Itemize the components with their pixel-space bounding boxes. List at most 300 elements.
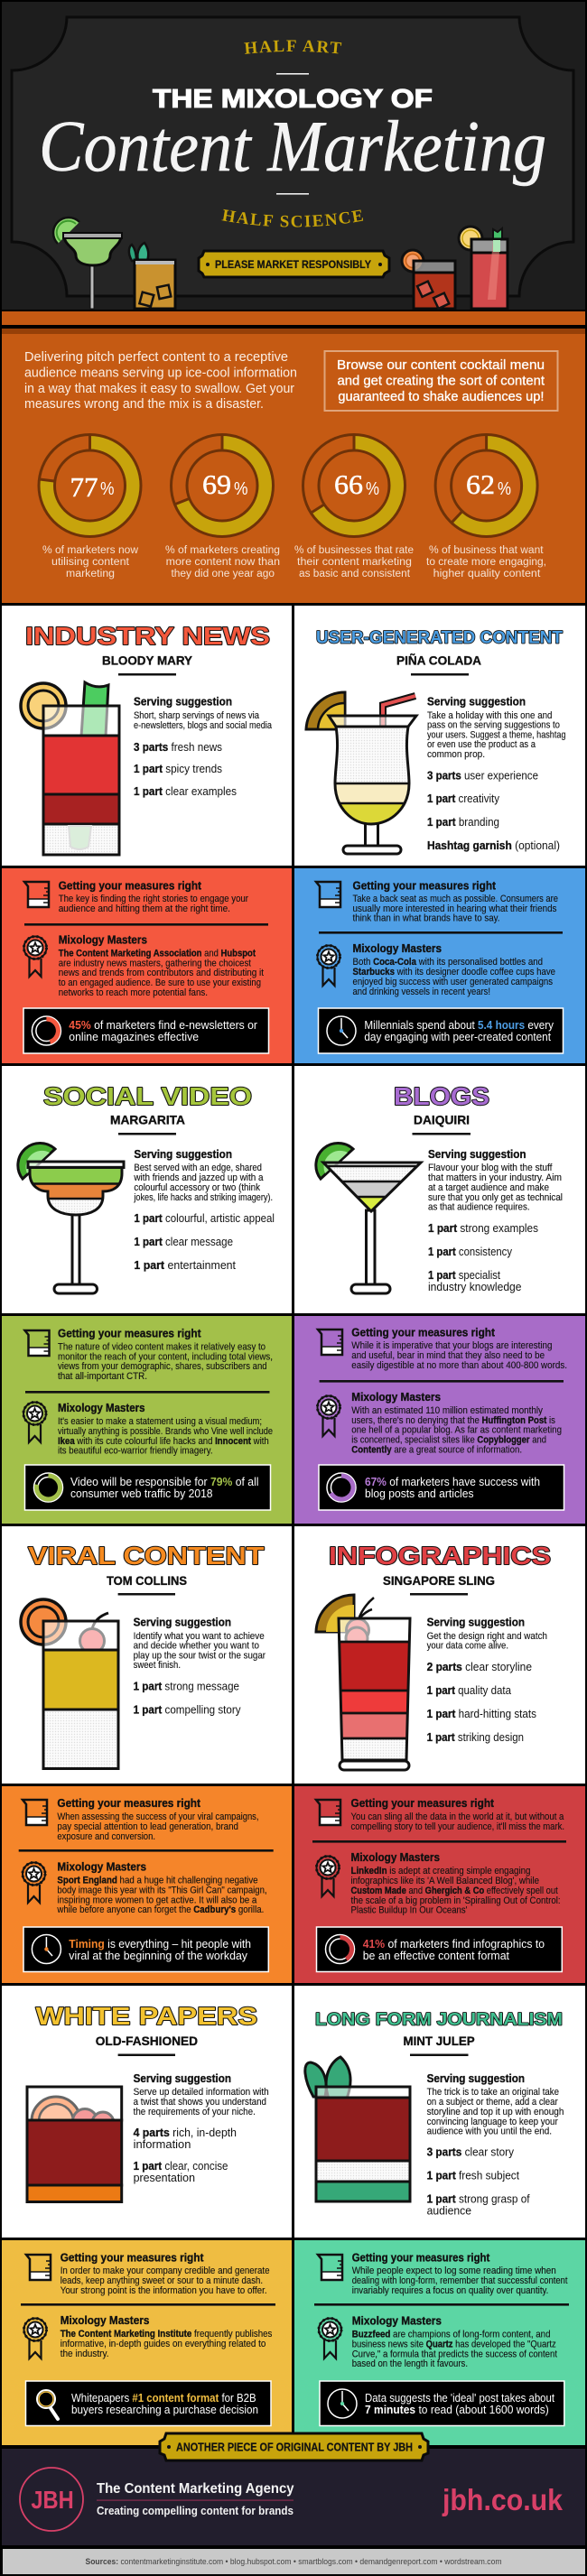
serving suggestion: industry knowledge bbox=[428, 1280, 522, 1293]
intro paragraph: audience means serving up ice-cool information bbox=[24, 365, 297, 381]
masters text: The Content Marketing Institute frequently publishes bbox=[61, 2329, 273, 2340]
icon: beaker bbox=[316, 882, 340, 907]
stat box: buyers researching a purchase decision bbox=[71, 2403, 258, 2416]
serving suggestion: audience bbox=[427, 2204, 471, 2217]
cocktail name: TOM COLLINS bbox=[107, 1573, 187, 1588]
masters text: Ikea with its cute colourful life hacks and Innocent with bbox=[58, 1436, 269, 1447]
measures text: The nature of video content makes it relatively easy to bbox=[58, 1341, 266, 1352]
stat box: day engaging with peer-created content bbox=[364, 1030, 551, 1043]
serving suggestion: Serving suggestion bbox=[134, 695, 232, 708]
donut: 62% bbox=[435, 434, 537, 536]
masters text: enjoyed big success with user generated campaigns bbox=[352, 977, 554, 987]
serving suggestion: convincing language to keep your bbox=[427, 2117, 558, 2127]
panel: white papers bbox=[2, 1986, 292, 2238]
measures text: In order to make your company credible and generate bbox=[61, 2266, 269, 2276]
stat box bbox=[319, 1465, 564, 1510]
serving suggestion: 3 parts fresh news bbox=[134, 740, 222, 754]
icon: tom collins glass bbox=[21, 1599, 118, 1769]
panel: industry news tips bbox=[2, 868, 292, 1063]
bar counter bbox=[2, 311, 585, 325]
stat box bbox=[25, 2381, 271, 2426]
tagline: half art: HALF ART bbox=[244, 40, 341, 54]
serving suggestion: 1 part strong message bbox=[134, 1679, 239, 1693]
serving suggestion: as that audience requires. bbox=[428, 1202, 530, 1213]
icon: margarita glass bbox=[18, 1143, 126, 1293]
masters text: Both Coca-Cola with its personalised bottles and bbox=[352, 957, 543, 968]
masters text: The Content Marketing Association and Hubspot bbox=[59, 948, 256, 959]
cocktail name: BLOODY MARY bbox=[102, 653, 193, 668]
caption: 66%: % of businesses that rate bbox=[294, 545, 414, 556]
serving suggestion bbox=[133, 1147, 275, 1272]
ornate frame bbox=[12, 17, 573, 296]
serving suggestion: 4 parts rich, in-depth bbox=[134, 2126, 237, 2139]
serving suggestion: sure that you only get as technical bbox=[428, 1192, 563, 1203]
panel: footer bbox=[2, 2449, 585, 2545]
measures text: Getting your measures right bbox=[61, 2251, 204, 2264]
serving suggestion: e-newsletters, blogs and social media bbox=[134, 720, 272, 731]
serving suggestion: or even use the product as a bbox=[427, 739, 536, 750]
stat box: Data suggests the 'ideal' post takes about bbox=[365, 2391, 554, 2405]
stat box: 67% of marketers have success with bbox=[365, 1475, 540, 1488]
caption: 77%: marketing bbox=[66, 569, 115, 579]
intro paragraph: measures wrong and the mix is a disaster. bbox=[24, 396, 264, 412]
icon: pina colada glass bbox=[306, 692, 416, 854]
serving suggestion: Identify what you want to achieve bbox=[134, 1631, 265, 1642]
serving suggestion: 1 part creativity bbox=[427, 792, 499, 805]
measures text: When assessing the success of your viral campaigns, bbox=[57, 1812, 259, 1822]
masters text: Mixology Masters bbox=[57, 1859, 146, 1874]
serving suggestion: Serving suggestion bbox=[427, 695, 526, 708]
serving suggestion: jokes, life hacks and striking imagery). bbox=[134, 1192, 273, 1203]
heading: LONG FORM JOURNALISM bbox=[315, 2011, 563, 2029]
masters text: With an estimated 110 million estimated monthly bbox=[351, 1405, 544, 1416]
donut: 77%: 77 bbox=[70, 471, 98, 503]
measures text: invariably requires a focus on quality over quantity. bbox=[352, 2285, 548, 2296]
measures text: easily digestible at no more than about 400-800 words. bbox=[351, 1360, 567, 1371]
serving suggestion: Serve up detailed information with bbox=[134, 2087, 269, 2098]
stat box bbox=[316, 1927, 562, 1971]
serving suggestion: 1 part striking design bbox=[427, 1730, 524, 1744]
callout: browse menu: Browse our content cocktail menu bbox=[337, 357, 545, 373]
serving suggestion: at a target audience and make bbox=[428, 1182, 549, 1193]
masters text: Mixology Masters bbox=[350, 1850, 440, 1864]
stat box: Millennials spend about 5.4 hours every bbox=[364, 1018, 554, 1032]
masters text: business news site Quartz has developed the "Quartz bbox=[352, 2340, 556, 2350]
masters text: It's easier to make a statement using a visual medium; bbox=[58, 1416, 262, 1427]
masters text: Mixology Masters bbox=[61, 2313, 149, 2327]
icon: medal bbox=[319, 2318, 341, 2358]
masters text: Mixology Masters bbox=[351, 1390, 441, 1404]
caption: 69%: more content now than bbox=[166, 557, 280, 568]
icon: medal bbox=[23, 2318, 47, 2358]
caption: 66%: as basic and consistent bbox=[299, 569, 411, 579]
masters text: inspiring more women to get active. It will also be a bbox=[57, 1895, 256, 1906]
serving suggestion bbox=[427, 695, 565, 852]
measures text bbox=[58, 1327, 273, 1382]
tagline: half science: HALF SCIENCE bbox=[222, 209, 363, 227]
serving suggestion: common prop. bbox=[427, 749, 485, 760]
stat box: 7 minutes to read (about 1600 words) bbox=[365, 2403, 549, 2416]
serving suggestion: 1 part quality data bbox=[427, 1683, 512, 1697]
cocktail name: OLD-FASHIONED bbox=[96, 2034, 198, 2048]
measures text: Getting your measures right bbox=[59, 879, 202, 892]
serving suggestion: 1 part clear, concise bbox=[134, 2159, 228, 2173]
serving suggestion: audience with you until the end. bbox=[427, 2127, 552, 2137]
badge: please market responsibly bbox=[199, 251, 389, 277]
masters text: Mixology Masters bbox=[59, 933, 147, 946]
heading: BLOGS bbox=[394, 1082, 489, 1110]
icon: medal bbox=[316, 1856, 340, 1896]
serving suggestion: 1 part branding bbox=[427, 815, 499, 829]
intro paragraph bbox=[24, 349, 297, 412]
donut: 62%: 62 bbox=[466, 468, 495, 500]
serving suggestion: play up the sour twist or the sugar bbox=[134, 1650, 266, 1661]
logo: JBH bbox=[20, 2468, 83, 2531]
panel: user-generated content bbox=[294, 606, 585, 866]
donut: 66%: 66 bbox=[334, 468, 363, 500]
icon: beaker bbox=[318, 1330, 342, 1355]
cocktail name: DAIQUIRI bbox=[414, 1112, 470, 1126]
serving suggestion: your data come alive. bbox=[427, 1641, 508, 1652]
serving suggestion bbox=[134, 1616, 266, 1717]
donut: 69% bbox=[172, 434, 273, 536]
masters text: the industry. bbox=[61, 2349, 109, 2359]
serving suggestion: 1 part spicy trends bbox=[134, 762, 222, 775]
serving suggestion: 1 part compelling story bbox=[134, 1702, 241, 1717]
measures text: Getting your measures right bbox=[352, 879, 497, 892]
serving suggestion bbox=[427, 2071, 564, 2217]
serving suggestion: on a subject or theme, add a clear bbox=[427, 2097, 558, 2108]
masters text: Plastic Buildup In Our Oceans' bbox=[350, 1904, 467, 1915]
masters text bbox=[352, 941, 555, 997]
icon: medal bbox=[318, 946, 340, 986]
masters text bbox=[352, 2314, 557, 2369]
panel: social video tips bbox=[2, 1316, 292, 1524]
serving suggestion: 1 part colourful, artistic appeal bbox=[134, 1211, 275, 1225]
masters text: body image this year with its "This Girl Can" campaign, bbox=[57, 1885, 267, 1895]
measures text: Getting your measures right bbox=[351, 1325, 496, 1339]
logo: JBH: JBH bbox=[31, 2486, 74, 2514]
panel: sources bbox=[3, 2549, 585, 2574]
serving suggestion: 1 part specialist bbox=[428, 1268, 500, 1282]
serving suggestion: Serving suggestion bbox=[134, 1616, 231, 1628]
cocktail name: SINGAPORE SLING bbox=[383, 1573, 495, 1588]
panel: sources: Sources: contentmarketinginstitute.com • blog.hubspot.com • smartblogs.com • demandgenreport.com • wordstream.com bbox=[85, 2557, 502, 2566]
masters text: informative, in-depth guides on everything related to bbox=[61, 2339, 266, 2349]
stat box: 45% of marketers find e-newsletters or bbox=[69, 1018, 258, 1032]
serving suggestion: Short, sharp servings of news via bbox=[134, 710, 259, 721]
donut: 77% bbox=[39, 434, 141, 536]
serving suggestion: presentation bbox=[134, 2171, 195, 2184]
heading: INFOGRAPHICS bbox=[329, 1542, 551, 1570]
icon: old-fashioned glass bbox=[27, 2087, 122, 2202]
serving suggestion: Take a holiday with this one and bbox=[427, 710, 553, 721]
icon: mint julep glass bbox=[305, 2057, 410, 2201]
serving suggestion: your users. Suggest a theme, hashtag bbox=[427, 729, 565, 740]
cocktail name: MARGARITA bbox=[110, 1112, 185, 1126]
donut: 69%: 69 bbox=[202, 468, 231, 500]
heading: VIRAL CONTENT bbox=[28, 1542, 265, 1570]
masters text: are industry news masters, gathering the choicest bbox=[59, 959, 251, 969]
serving suggestion bbox=[427, 1616, 547, 1744]
icon: beaker bbox=[318, 2255, 342, 2280]
serving suggestion: information bbox=[134, 2137, 191, 2151]
measures text bbox=[59, 879, 248, 914]
panel: industry news bbox=[2, 606, 292, 866]
stat box bbox=[23, 1008, 269, 1053]
serving suggestion: Serving suggestion bbox=[427, 1616, 525, 1628]
heading: SOCIAL VIDEO bbox=[43, 1082, 252, 1110]
serving suggestion: 1 part clear examples bbox=[134, 784, 237, 798]
serving suggestion: Get the design right and watch bbox=[427, 1631, 547, 1642]
caption: 69%: % of marketers creating bbox=[165, 545, 280, 556]
stat box: Timing is everything – hit people with bbox=[69, 1937, 251, 1951]
panel: blogs bbox=[294, 1066, 585, 1313]
serving suggestion: a twist that shows you understand bbox=[134, 2097, 266, 2108]
measures text bbox=[57, 1796, 259, 1842]
icon: amber tumbler bbox=[129, 243, 175, 309]
measures text: that all-important CTR. bbox=[58, 1371, 147, 1382]
panel: long form journalism bbox=[294, 1986, 585, 2238]
masters text: Curve," a formula that predicts the success of content bbox=[352, 2349, 557, 2359]
masters text: Mixology Masters bbox=[352, 941, 442, 955]
title line 2 script: Content Marketing bbox=[39, 107, 546, 187]
serving suggestion: 3 parts user experience bbox=[427, 769, 538, 782]
donut: 69%: % bbox=[234, 479, 248, 499]
measures text: audience and hitting them at the right time. bbox=[59, 903, 230, 914]
icon: medal bbox=[23, 1403, 46, 1442]
measures text bbox=[350, 1796, 564, 1832]
measures text: and useful, bear in mind that they also need to be bbox=[351, 1350, 545, 1361]
masters text: networks to reach more potential fans. bbox=[59, 987, 208, 998]
measures text: Getting your measures right bbox=[350, 1796, 495, 1810]
callout: browse menu: guaranteed to shake audiences up! bbox=[338, 389, 544, 404]
panel: long form tips bbox=[294, 2240, 585, 2445]
caption: 77%: utilising content bbox=[51, 557, 130, 568]
measures text: Getting your measures right bbox=[58, 1327, 201, 1339]
panel: infographics tips bbox=[294, 1786, 585, 1983]
masters text: while before anyone can forget the Cadbury's gorilla. bbox=[57, 1904, 264, 1915]
measures text: usually more interested in hearing what their friends bbox=[352, 903, 557, 914]
icon: medal bbox=[318, 1395, 340, 1436]
panel: social video bbox=[2, 1066, 292, 1313]
masters text bbox=[61, 2313, 273, 2359]
icon: beaker bbox=[26, 2255, 51, 2280]
serving suggestion: sweet finish. bbox=[134, 1660, 181, 1671]
icon: beaker bbox=[23, 1800, 47, 1825]
measures text: leads, keep anything sweet or sour to a minute dash. bbox=[61, 2275, 263, 2286]
serving suggestion: 3 parts clear story bbox=[427, 2145, 514, 2159]
caption: 62% bbox=[426, 545, 546, 579]
serving suggestion: 1 part consistency bbox=[428, 1245, 512, 1258]
icon: beaker bbox=[25, 1330, 49, 1356]
stat box bbox=[25, 1465, 271, 1510]
agency name: The Content Marketing Agency bbox=[97, 2481, 294, 2497]
caption: 62%: to create more engaging, bbox=[426, 557, 546, 568]
serving suggestion: with friends and jazzed up with a bbox=[133, 1172, 264, 1183]
masters text: and drinking vessels in recent years! bbox=[352, 987, 490, 997]
measures text: While people expect to log some reading time when bbox=[352, 2266, 556, 2276]
heading: WHITE PAPERS bbox=[36, 2002, 257, 2030]
icon: beaker bbox=[316, 1800, 340, 1825]
panel: blogs tips bbox=[294, 1316, 585, 1524]
serving suggestion: that matters in your industry. Aim bbox=[428, 1172, 562, 1183]
stat box: Whitepapers #1 content format for B2B bbox=[71, 2391, 256, 2405]
cocktail name: MINT JULEP bbox=[403, 2034, 475, 2048]
panel: intro bbox=[2, 329, 585, 603]
panel: viral content bbox=[2, 1526, 292, 1784]
serving suggestion: Serving suggestion bbox=[428, 1147, 526, 1161]
serving suggestion: 1 part entertainment bbox=[134, 1258, 236, 1272]
measures text: exposure and conversion. bbox=[57, 1831, 155, 1842]
masters text bbox=[57, 1859, 267, 1915]
caption: 62%: higher quality content bbox=[433, 569, 541, 579]
measures text: Your strong point is the information you have to offer. bbox=[61, 2285, 267, 2296]
serving suggestion bbox=[134, 2071, 269, 2184]
caption: 69% bbox=[165, 545, 280, 579]
callout: browse menu: and get creating the sort of content bbox=[338, 374, 545, 388]
serving suggestion: Hashtag garnish (optional) bbox=[427, 839, 560, 852]
panel: user-generated tips bbox=[294, 868, 585, 1063]
panel: white papers tips bbox=[2, 2240, 292, 2445]
caption: 77%: % of marketers now bbox=[42, 545, 139, 556]
measures text: pay special attention to lead generation, brand bbox=[57, 1821, 238, 1832]
caption: 66% bbox=[294, 545, 414, 579]
cocktail name: PIÑA COLADA bbox=[396, 652, 481, 668]
masters text: Sport England had a huge hit challenging negative bbox=[57, 1876, 258, 1886]
intro paragraph: Delivering pitch perfect content to a receptive bbox=[24, 349, 288, 365]
stat box bbox=[318, 1008, 564, 1053]
serving suggestion: storyline and top it up with enough bbox=[427, 2107, 564, 2117]
caption: 66%: their content marketing bbox=[297, 557, 412, 568]
caption: 77% bbox=[42, 545, 139, 579]
masters text: Custom Made and Ghergich & Co effectively spell out bbox=[350, 1886, 558, 1896]
title line 1: THE MIXOLOGY OF bbox=[153, 85, 433, 114]
masters text: one hell of a popular blog. As far as content marketing bbox=[351, 1424, 562, 1435]
badge: please market responsibly: PLEASE MARKET RESPONSIBLY bbox=[215, 260, 371, 271]
measures text: Getting your measures right bbox=[57, 1796, 201, 1810]
heading: USER-GENERATED CONTENT bbox=[316, 628, 563, 648]
measures text: monitor the reach of your content, including total views, bbox=[58, 1352, 273, 1363]
measures text: think than in what brands have to say. bbox=[352, 913, 500, 924]
serving suggestion: pass on the serving suggestions to bbox=[427, 720, 560, 731]
serving suggestion: Serving suggestion bbox=[134, 2071, 231, 2085]
serving suggestion: Serving suggestion bbox=[134, 1147, 232, 1161]
measures text: While it is imperative that your blogs are interesting bbox=[351, 1340, 553, 1351]
donut: 66% bbox=[303, 434, 405, 536]
serving suggestion bbox=[134, 695, 272, 798]
measures text: views from your demographic, shares, subscribers and bbox=[58, 1361, 267, 1372]
masters text: based on the length it favours. bbox=[352, 2358, 468, 2369]
masters text: Contently are a great source of information. bbox=[351, 1444, 522, 1455]
stat box: blog posts and articles bbox=[365, 1487, 474, 1500]
masters text: news and trends from contributors and distributing it bbox=[59, 968, 264, 978]
masters text: Mixology Masters bbox=[58, 1401, 144, 1414]
serving suggestion bbox=[428, 1147, 563, 1293]
serving suggestion: 1 part clear message bbox=[134, 1235, 233, 1248]
stat box: online magazines effective bbox=[69, 1030, 199, 1043]
serving suggestion: 1 part hard-hitting stats bbox=[427, 1707, 536, 1720]
icon: singapore sling glass bbox=[316, 1595, 415, 1770]
icon: margarita bbox=[53, 218, 122, 309]
icon: daiquiri glass bbox=[316, 1143, 424, 1293]
agency strapline: Creating compelling content for brands bbox=[97, 2504, 294, 2517]
stat box: Video will be responsible for 79% of all bbox=[70, 1475, 259, 1488]
badge: original content: ANOTHER PIECE OF ORIGINAL CONTENT BY JBH bbox=[176, 2441, 413, 2453]
header chalkboard bbox=[2, 2, 585, 310]
masters text: is concerned, specialist sites like Copyblogger and bbox=[351, 1435, 546, 1446]
measures text: Getting your measures right bbox=[352, 2251, 490, 2264]
measures text bbox=[352, 2251, 567, 2296]
masters text: its beautiful eco-warrior friendly imagery. bbox=[58, 1446, 213, 1457]
heading: INDUSTRY NEWS bbox=[25, 622, 270, 650]
donut: 62%: % bbox=[498, 479, 511, 499]
masters text bbox=[350, 1850, 561, 1915]
callout: browse menu bbox=[325, 351, 558, 411]
masters text: virtually anything is possible. Brands who Vine well include bbox=[58, 1426, 273, 1437]
measures text bbox=[61, 2251, 269, 2296]
intro paragraph: in a way that makes it easy to swallow. Get your bbox=[24, 381, 294, 396]
caption: 69%: they did one year ago bbox=[172, 569, 275, 579]
masters text bbox=[351, 1390, 562, 1455]
masters text bbox=[59, 933, 264, 998]
serving suggestion: 1 part strong examples bbox=[428, 1221, 538, 1235]
serving suggestion: 1 part fresh subject bbox=[427, 2168, 519, 2182]
masters text: Starbucks with its designer doodle coffee cups have bbox=[352, 967, 555, 978]
donut: 66%: % bbox=[366, 479, 379, 499]
caption: 62%: % of business that want bbox=[429, 545, 544, 556]
stat box: 41% of marketers find infographics to bbox=[363, 1937, 545, 1951]
stat box: be an effective content format bbox=[363, 1949, 509, 1962]
tagline: half art bbox=[244, 40, 341, 54]
masters text: LinkedIn is adept at creating simple engaging bbox=[350, 1866, 531, 1876]
serving suggestion: 2 parts clear storyline bbox=[427, 1660, 532, 1673]
serving suggestion: the requirements of your niche. bbox=[134, 2107, 256, 2117]
measures text: You can sling all the data in the world at it, but without a bbox=[350, 1812, 564, 1822]
stat box: viral at the beginning of the workday bbox=[69, 1949, 247, 1962]
masters text: Mixology Masters bbox=[352, 2314, 442, 2327]
measures text bbox=[352, 879, 558, 924]
masters text bbox=[58, 1401, 273, 1457]
panel: infographics bbox=[294, 1526, 585, 1784]
masters text: infographics like its 'A Well Balanced Blog', while bbox=[350, 1876, 539, 1886]
serving suggestion: and decide whether you want to bbox=[134, 1641, 259, 1652]
serving suggestion: Flavour your blog with the stuff bbox=[428, 1163, 553, 1173]
serving suggestion: Serving suggestion bbox=[427, 2071, 525, 2085]
masters text: to an engaged audience. Be sure to use your existing bbox=[59, 978, 261, 988]
serving suggestion: The trick is to take an original take bbox=[427, 2087, 559, 2098]
serving suggestion: Best served with an edge, shared bbox=[134, 1163, 262, 1173]
icon: red tumbler with orange bbox=[402, 250, 455, 309]
measures text: Take a back seat as much as possible. Consumers are bbox=[352, 894, 558, 904]
stat box bbox=[320, 2381, 564, 2426]
url: jbh.co.uk bbox=[442, 2483, 564, 2516]
measures text bbox=[351, 1325, 567, 1371]
stat box bbox=[23, 1927, 268, 1971]
masters text: the scale of a big problem in 'Spiralling Out of Control: bbox=[350, 1895, 561, 1906]
icon: bloody mary glass bbox=[21, 682, 119, 855]
masters text: Buzzfeed are champions of long-form content, and bbox=[352, 2329, 551, 2340]
serving suggestion: 1 part strong grasp of bbox=[427, 2191, 530, 2206]
panel: viral content tips bbox=[2, 1786, 292, 1983]
serving suggestion: colourful accessory or two (think bbox=[134, 1182, 261, 1193]
icon: medal bbox=[23, 937, 47, 977]
donut: 77%: % bbox=[100, 479, 115, 499]
icon: tall red glass with lemon bbox=[459, 227, 508, 309]
icon: beaker bbox=[24, 882, 49, 907]
stat box: consumer web traffic by 2018 bbox=[70, 1487, 213, 1500]
masters text: users, there's no denying that the Huffington Post is bbox=[351, 1415, 556, 1426]
